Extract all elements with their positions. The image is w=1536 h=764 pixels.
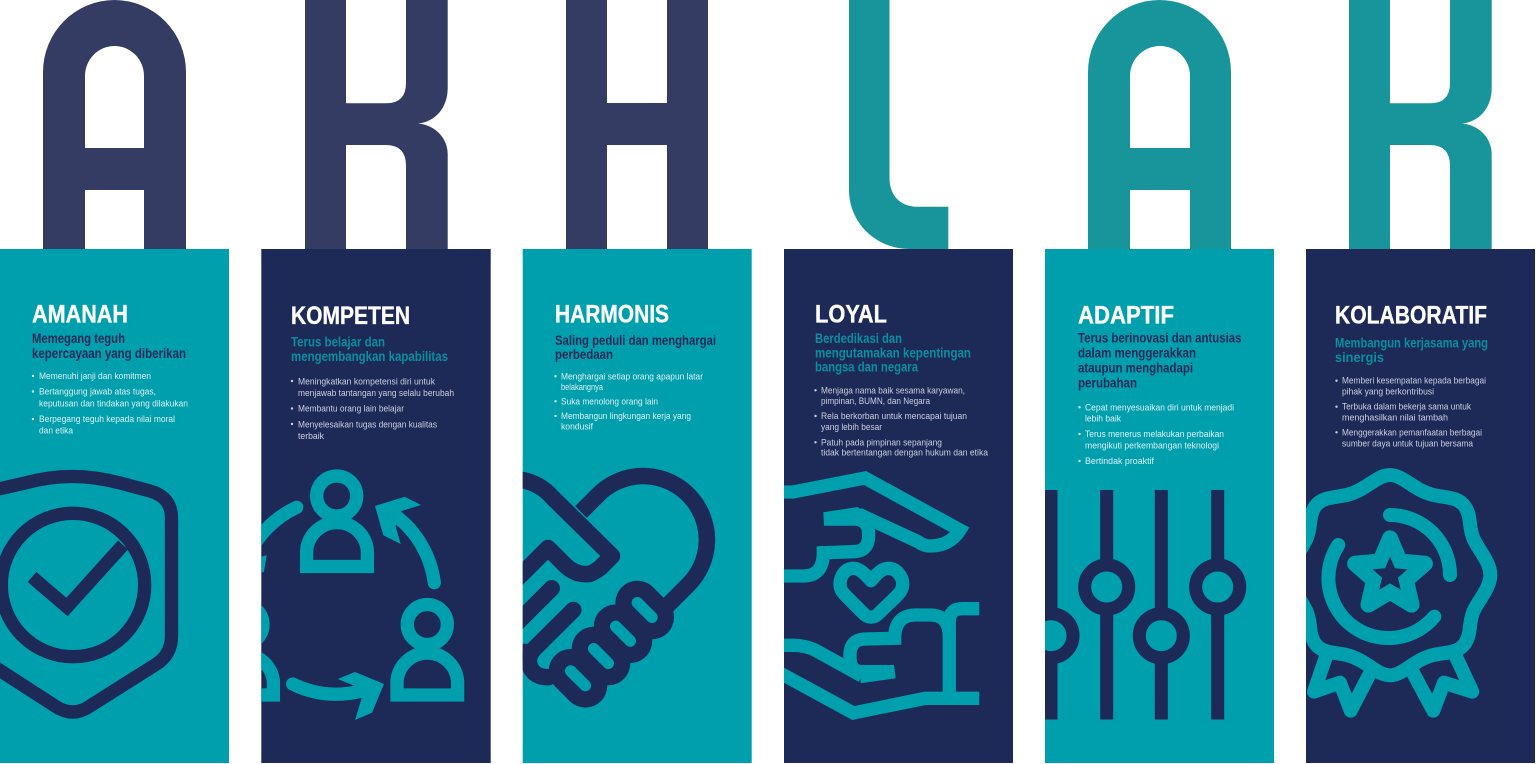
bullet list: pimpinan, BUMN, dan Negara [821,396,931,407]
bullet list: Cepat menyesuaikan diri untuk menjadi [1085,402,1234,413]
subheading: Terus belajar dan [291,335,385,350]
bullet list [32,371,188,437]
bullet list: tidak bertentangan dengan hukum dan etika [821,448,989,459]
bullet list: Patuh pada pimpinan sepanjang [821,437,942,448]
bullet list: Memberi kesempatan kepada berbagai [1342,376,1486,387]
bullet list: Bertanggung jawab atas tugas, [39,387,156,398]
subheading: bangsa dan negara [815,360,918,375]
subheading: sinergis [1335,350,1384,365]
bullet list: Membantu orang lain belajar [298,404,405,415]
bullet list: Menghargai setiap orang apapun latar [561,371,704,382]
letter H [566,0,708,249]
panel: KOLABORATIF [1290,249,1535,763]
icon: handshake [515,476,707,686]
panel background [523,249,752,763]
heading: AMANAH [32,300,128,328]
panel: LOYAL [780,249,1013,763]
panel: AMANAH [0,249,229,763]
subheading: Terus berinovasi dan antusias [1078,330,1242,345]
letter A [43,0,186,249]
bullet list: pihak yang berkontribusi [1342,387,1434,398]
bullet list: Suka menolong orang lain [561,396,658,407]
subheading: dalam menggerakkan [1078,345,1196,360]
bullet list: Meningkatkan kompetensi diri untuk [298,376,435,387]
bullet list: yang lebih besar [821,422,883,433]
icon: shield with check [0,476,172,712]
subheading [555,333,716,362]
bullet list: Bertindak proaktif [1085,456,1154,467]
subheading [291,335,448,364]
panel background [784,249,1013,763]
panel background [1045,249,1274,763]
subheading: mengutamakan kepentingan [815,345,971,360]
subheading: Saling peduli dan menghargai [555,333,716,348]
bullet list [291,376,454,442]
subheading: Berdedikasi dan [815,331,902,346]
heading: ADAPTIF [1078,301,1174,329]
panel: HARMONIS [515,249,752,763]
subheading: mengembangkan kapabilitas [291,349,448,364]
icon: award badge with star [1290,475,1490,711]
bullet list: lebih baik [1085,414,1121,425]
big letters: AKHLAK [43,0,1492,249]
heading: KOLABORATIF [1335,301,1487,329]
subheading: Membangun kerjasama yang [1335,335,1488,350]
subheading: kepercayaan yang diberikan [32,346,186,361]
bullet list [554,371,704,432]
icon: hands with heart [780,478,979,713]
heading: KOMPETEN [291,302,410,330]
bullet list: mengikuti perkembangan teknologi [1085,441,1219,452]
letter K [1349,0,1492,249]
bullet list: menghasilkan nilai tambah [1342,413,1448,424]
icon: people cycle [261,469,464,720]
bullet list: keputusan dan tindakan yang dilakukan [39,398,188,409]
panel background [261,249,491,763]
bullet list [1078,402,1234,467]
subheading [1078,330,1242,390]
bullet list: Menyelesaikan tugas dengan kualitas [298,419,437,430]
subheading: ataupun menghadapi [1078,360,1193,375]
letter K [305,0,448,249]
bullet list: terbaik [298,431,324,442]
bullet list: Rela berkorban untuk mencapai tujuan [821,411,967,422]
subheading: Memegang teguh [32,331,125,346]
bullet list: Berpegang teguh kepada nilai moral [39,414,175,425]
icon: sliders [1029,490,1240,720]
bullet list: Memenuhi janji dan komitmen [39,371,151,382]
subheading [1335,335,1488,365]
bullet list: belakangnya [561,382,604,393]
heading: LOYAL [815,300,887,328]
panel background [0,249,229,763]
subheading: perbedaan [555,347,613,362]
bullet list [814,385,989,459]
bullet list: Membangun lingkungan kerja yang [561,411,691,422]
heading: HARMONIS [555,300,669,328]
subheading [815,331,971,375]
bullet list: Terbuka dalam bekerja sama untuk [1342,402,1471,413]
panel background [1306,249,1535,763]
bullet list: kondusif [561,422,593,432]
bullet list: sumber daya untuk tujuan bersama [1342,438,1474,449]
bullet list: Terus menerus melakukan perbaikan [1085,429,1224,440]
bullet list: menjawab tantangan yang selalu berubah [298,388,454,399]
subheading [32,331,186,361]
letter A [1088,0,1231,249]
panel: KOMPETEN [261,249,491,763]
subheading: perubahan [1078,375,1137,390]
letter L [849,0,948,249]
bullet list: Menjaga nama baik sesama karyawan, [821,385,965,396]
bullet list [1335,376,1486,449]
bullet list: dan etika [39,426,74,437]
bullet list: Menggerakkan pemanfaatan berbagai [1342,427,1482,438]
panel: ADAPTIF [1029,249,1274,763]
